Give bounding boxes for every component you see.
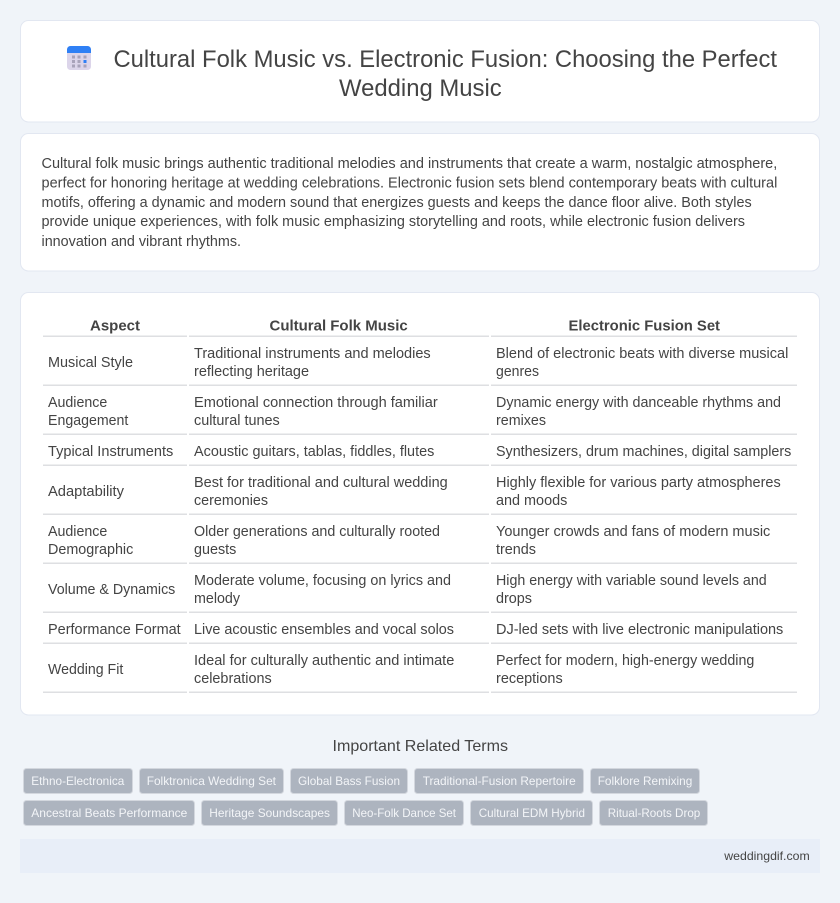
row: performance format <box>43 622 797 644</box>
row: performance format: Performance Format <box>48 622 181 638</box>
title: Cultural Folk Music vs. Electronic Fusion: Choosing the Perfect <box>114 46 777 73</box>
tag: Ritual-Roots Drop <box>600 800 708 826</box>
table header row <box>43 318 797 337</box>
row: musical style: Blend of electronic beats with diverse musical <box>496 346 788 362</box>
tag: Ethno-Electronica <box>24 768 132 794</box>
table header row: Cultural Folk Music <box>270 318 408 334</box>
row: performance format: Live acoustic ensembles and vocal solos <box>194 622 454 638</box>
row: wedding fit: Perfect for modern, high-energy wedding <box>496 653 754 669</box>
row: wedding fit: Ideal for culturally authentic and intimate <box>194 653 454 669</box>
row: typical instruments: Synthesizers, drum machines, digital samplers <box>496 444 791 460</box>
heading: important related terms: Important Related Terms <box>332 738 508 755</box>
intro text block: motifs, offering a dynamic and modern sound that energizes guests and keeps the dance floor alive. Both styles <box>42 195 752 211</box>
row: musical style: Musical Style <box>48 355 133 371</box>
row: audience engagement: Dynamic energy with danceable rhythms and <box>496 395 781 411</box>
table header row: Electronic Fusion Set <box>568 318 720 334</box>
row: wedding fit: Wedding Fit <box>48 662 123 678</box>
row: adaptability: Adaptability <box>48 484 125 500</box>
intro text block <box>42 156 777 250</box>
row: audience demographic: guests <box>194 542 236 558</box>
panel: comparison table <box>20 292 820 715</box>
panel: introduction <box>20 134 820 271</box>
tag: Ancestral Beats Performance <box>24 800 194 826</box>
intro text block: Cultural folk music brings authentic traditional melodies and instruments that create a warm, nostalgic atmosphere, <box>42 156 777 172</box>
row: audience engagement: Emotional connection through familiar <box>194 395 438 411</box>
row: audience demographic: Younger crowds and fans of modern music <box>496 524 770 540</box>
table header row: Aspect <box>90 318 140 334</box>
tag: Traditional-Fusion Repertoire <box>414 768 584 794</box>
row: volume and dynamics <box>43 573 797 613</box>
row: typical instruments: Acoustic guitars, tablas, fiddles, flutes <box>194 444 434 460</box>
row: audience demographic: trends <box>496 542 536 558</box>
row: typical instruments <box>43 444 797 466</box>
row: audience demographic: Older generations and culturally rooted <box>194 524 440 540</box>
row: audience demographic <box>43 524 797 564</box>
tag: Heritage Soundscapes: Heritage Soundscapes <box>209 806 330 820</box>
row: audience engagement: remixes <box>496 413 546 429</box>
row: audience engagement: Audience <box>48 395 107 411</box>
tag: Folklore Remixing: Folklore Remixing <box>598 774 692 788</box>
row: wedding fit <box>43 653 797 693</box>
footer: weddingdif.com <box>723 849 810 863</box>
tag: Ritual-Roots Drop: Ritual-Roots Drop <box>608 806 701 820</box>
row: wedding fit: receptions <box>496 671 563 687</box>
icon: calendar <box>67 46 91 70</box>
title: Wedding Music <box>339 75 502 102</box>
row: musical style: Traditional instruments and melodies <box>194 346 431 362</box>
tag: Heritage Soundscapes <box>202 800 338 826</box>
tag: Folktronica Wedding Set: Folktronica Wedding Set <box>147 774 277 788</box>
title <box>114 46 777 102</box>
row: adaptability: ceremonies <box>194 493 268 509</box>
tag: Global Bass Fusion: Global Bass Fusion <box>298 774 400 788</box>
row: audience demographic: Demographic <box>48 542 133 558</box>
panel: related term tags <box>24 768 708 826</box>
row: typical instruments: Typical Instruments <box>48 444 173 460</box>
intro text block: provide unique experiences, with folk music emphasizing storytelling and roots, while electronic fusion delivers <box>42 214 745 230</box>
tag: Neo-Folk Dance Set: Neo-Folk Dance Set <box>352 806 457 820</box>
tag: Cultural EDM Hybrid: Cultural EDM Hybrid <box>479 806 585 820</box>
row: adaptability: Best for traditional and cultural wedding <box>194 475 448 491</box>
tag: Cultural EDM Hybrid <box>470 800 592 826</box>
tag: Traditional-Fusion Repertoire: Traditional-Fusion Repertoire <box>423 774 576 788</box>
row: musical style <box>43 346 797 386</box>
tag: Folklore Remixing <box>590 768 700 794</box>
row: volume and dynamics: Volume & Dynamics <box>48 582 175 598</box>
row: musical style: genres <box>496 364 539 380</box>
row: audience engagement: Engagement <box>48 413 128 429</box>
tag: Ancestral Beats Performance: Ancestral Beats Performance <box>31 806 188 820</box>
row: volume and dynamics: drops <box>496 591 532 607</box>
row: adaptability: and moods <box>496 493 567 509</box>
row: audience engagement <box>43 395 797 435</box>
tag: Neo-Folk Dance Set <box>344 800 464 826</box>
tag: Folktronica Wedding Set <box>140 768 284 794</box>
footer <box>20 839 820 873</box>
intro text block: perfect for honoring heritage at wedding celebrations. Electronic fusion sets blend contemporary beats with cultural <box>42 176 777 192</box>
row: adaptability <box>43 475 797 515</box>
row: volume and dynamics: melody <box>194 591 241 607</box>
row: audience demographic: Audience <box>48 524 107 540</box>
row: performance format: DJ-led sets with live electronic manipulations <box>496 622 783 638</box>
row: adaptability: Highly flexible for various party atmospheres <box>496 475 781 491</box>
row: musical style: reflecting heritage <box>194 364 309 380</box>
tag: Ethno-Electronica: Ethno-Electronica <box>31 774 125 788</box>
row: volume and dynamics: High energy with variable sound levels and <box>496 573 767 589</box>
intro text block: innovation and vibrant rhythms. <box>42 234 241 250</box>
tag: Global Bass Fusion <box>290 768 408 794</box>
panel: header <box>20 20 820 122</box>
row: volume and dynamics: Moderate volume, focusing on lyrics and <box>194 573 451 589</box>
row: audience engagement: cultural tunes <box>194 413 280 429</box>
row: wedding fit: celebrations <box>194 671 272 687</box>
